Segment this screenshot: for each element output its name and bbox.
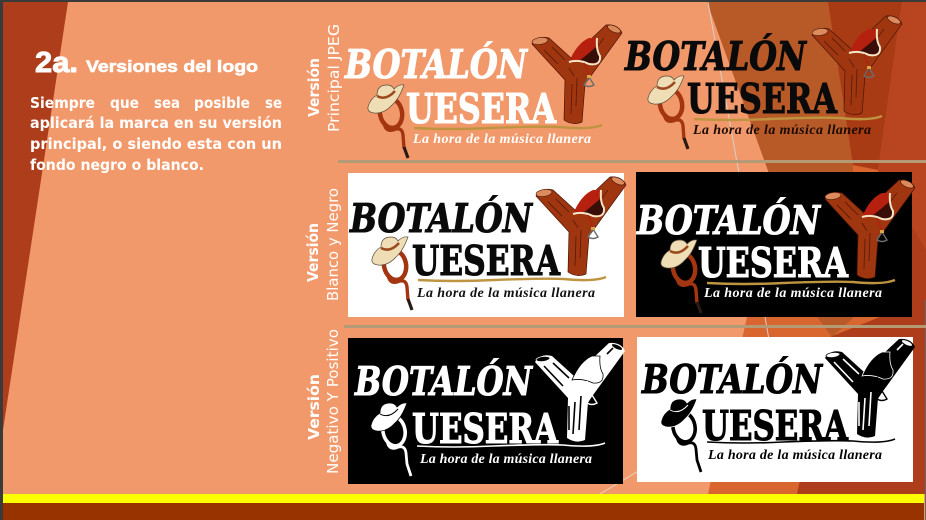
label: version blanco y negro bbox=[304, 188, 342, 301]
body text: sea bbox=[154, 94, 180, 112]
logo: principal white text bbox=[344, 23, 622, 158]
body text: se bbox=[265, 94, 282, 112]
title: 2a. bbox=[35, 47, 78, 79]
label: version negativo y positivo: Versión bbox=[305, 374, 323, 440]
divider: row 1 bbox=[338, 160, 926, 163]
logo panel: negative: La hora de la música llanera bbox=[419, 452, 592, 467]
logo panel: white background colour: La hora de la música llanera bbox=[416, 286, 595, 301]
body text: que bbox=[110, 94, 139, 112]
body text: fondo negro o blanco. bbox=[30, 156, 204, 174]
label: version negativo y positivo: Negativo Y Positivo bbox=[324, 329, 342, 474]
body text: principal, o siendo esta con un bbox=[30, 135, 282, 153]
left dark facet bbox=[3, 2, 68, 430]
logo panel: black background colour: La hora de la música llanera bbox=[703, 286, 882, 301]
logo: principal white text: UESERA bbox=[406, 85, 557, 133]
logo panel: black background colour: UESERA bbox=[698, 239, 849, 287]
logo: principal black text bbox=[624, 14, 902, 149]
body text bbox=[30, 94, 282, 174]
label: version principal: Versión bbox=[305, 58, 323, 117]
logo: principal black text: La hora de la música llanera bbox=[692, 123, 871, 138]
logo panel: white background colour: UESERA bbox=[412, 237, 561, 285]
logo panel: positive: UESERA bbox=[702, 402, 849, 450]
logo: principal black text: UESERA bbox=[687, 75, 838, 123]
yellow bar bbox=[3, 494, 924, 503]
bottom band bbox=[3, 503, 924, 520]
logo panel: positive: La hora de la música llanera bbox=[707, 448, 882, 463]
divider: row 2 bbox=[344, 325, 926, 328]
logo panel: negative: UESERA bbox=[412, 405, 559, 453]
logo panel: positive: BOTALÓN bbox=[641, 356, 823, 403]
label: version blanco y negro: Blanco y Negro bbox=[324, 188, 342, 301]
logo panel: negative bbox=[348, 338, 625, 484]
body text: Siempre bbox=[30, 94, 95, 112]
right background facets bbox=[600, 2, 926, 494]
logo: principal black text: BOTALÓN bbox=[624, 33, 807, 80]
body text: aplicará la marca en su versión bbox=[30, 114, 282, 132]
logo: principal white text: La hora de la música llanera bbox=[412, 132, 591, 147]
label: version principal bbox=[305, 24, 343, 132]
logo panel: black background colour: BOTALÓN bbox=[636, 197, 821, 244]
label: version blanco y negro: Versión bbox=[304, 223, 322, 282]
logo panel: negative: BOTALÓN bbox=[354, 358, 533, 405]
body text: posible bbox=[194, 94, 250, 112]
logo panel: black background colour bbox=[636, 172, 915, 317]
logo panel: positive bbox=[637, 337, 915, 482]
label: version negativo y positivo bbox=[305, 329, 342, 474]
logo panel: white background colour: BOTALÓN bbox=[349, 195, 533, 242]
title bbox=[35, 47, 258, 79]
label: version principal: Principal JPEG bbox=[325, 24, 343, 132]
title: Versiones del logo bbox=[86, 57, 258, 76]
logo: principal white text: BOTALÓN bbox=[344, 41, 528, 88]
logo panel: white background colour bbox=[348, 173, 626, 317]
